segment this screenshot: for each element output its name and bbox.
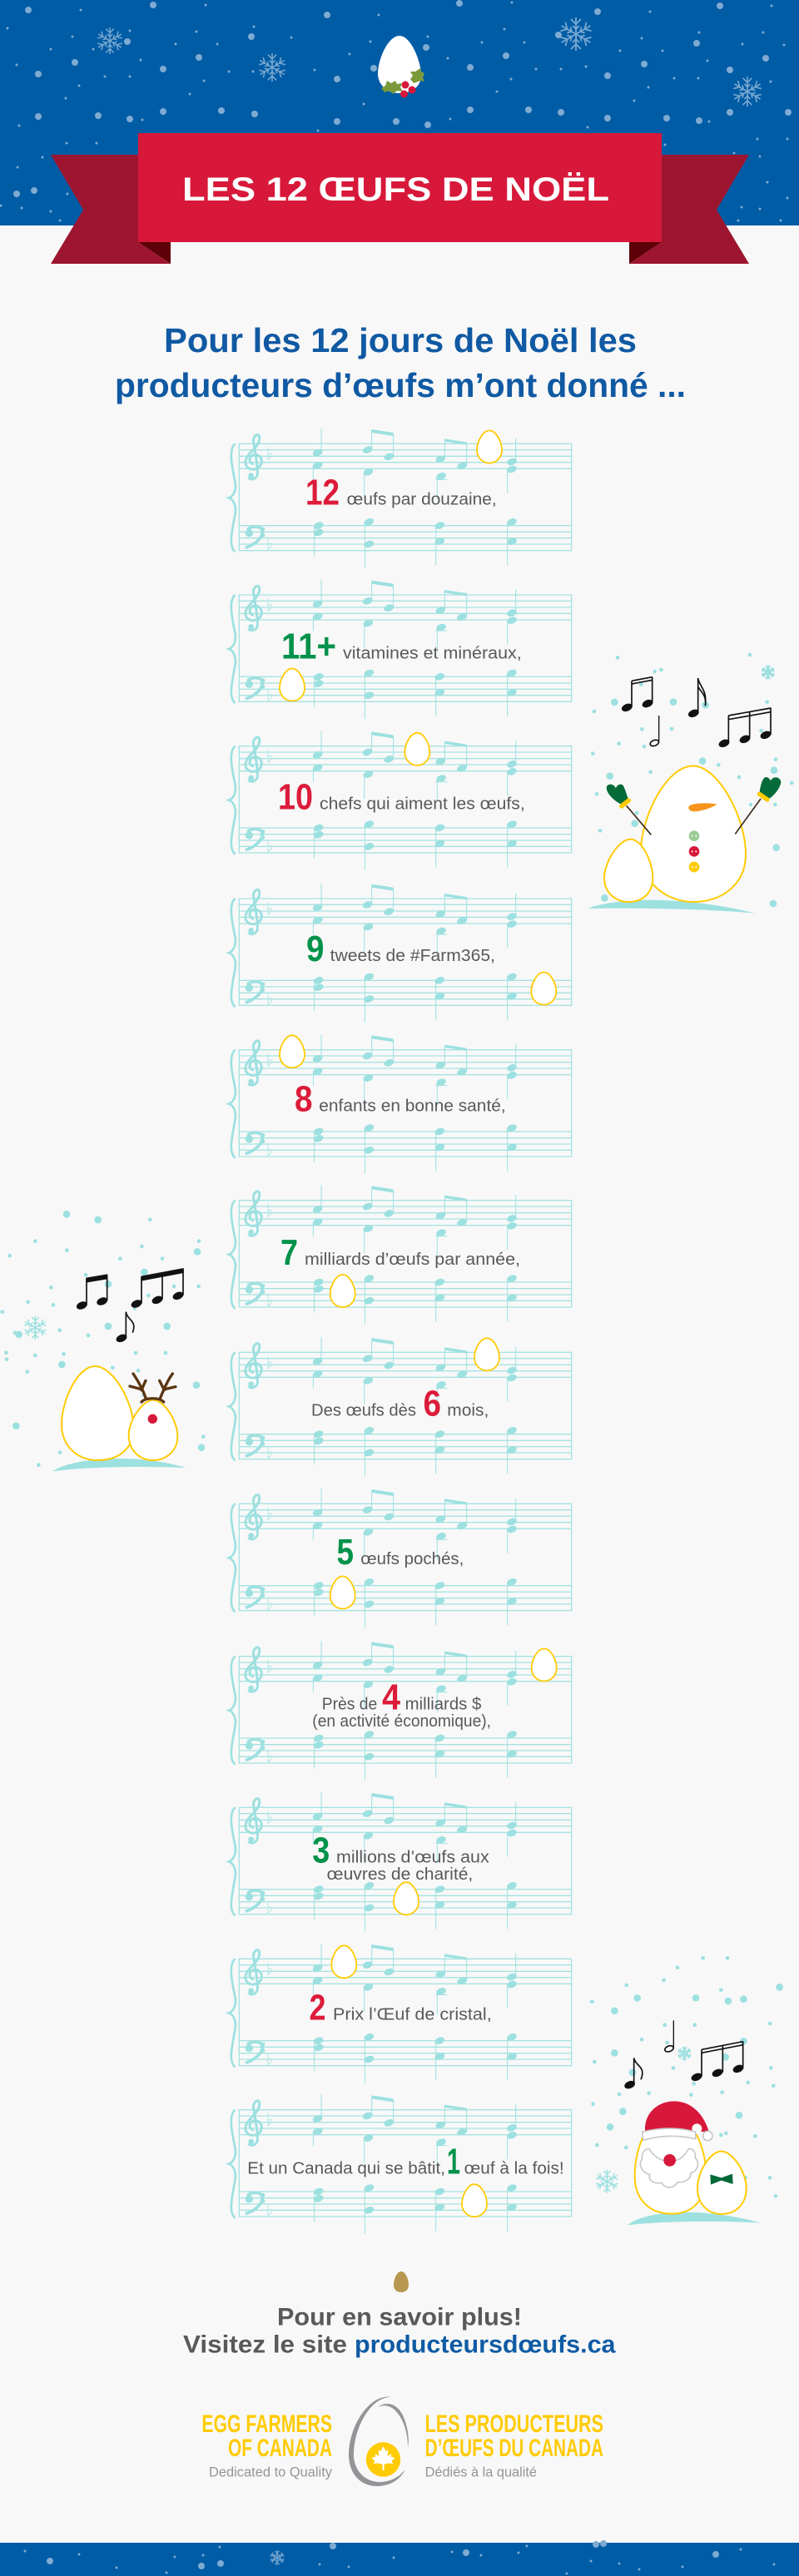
- footer band with snow: [0, 2543, 799, 2576]
- icon: small gold egg: [394, 2271, 409, 2292]
- snowman body egg: [641, 766, 746, 902]
- staff 5: 8 enfants en bonne santé: [229, 1034, 572, 1174]
- buttons: [689, 830, 699, 872]
- staff 3: 10 chefs qui aiment les œufs: chefs qui aiment les œufs,: [320, 795, 525, 814]
- red nose: [148, 1414, 157, 1424]
- subtitle heading: producteurs d’œufs m’ont donné ...: [115, 366, 686, 404]
- small egg: [604, 840, 653, 902]
- staff 5: 8 enfants en bonne santé: 8: [295, 1079, 313, 1120]
- subtitle heading: [115, 321, 686, 404]
- santa nose: [663, 2154, 676, 2167]
- logo: Egg Farmers of Canada: LES PRODUCTEURS: [425, 2410, 603, 2438]
- carrot nose: [688, 803, 717, 811]
- snow ground: [588, 900, 755, 914]
- staff 5: 8 enfants en bonne santé: enfants en bonne santé,: [319, 1097, 506, 1116]
- call to action: [183, 2303, 616, 2358]
- staff 8: 5 œufs pochés: [229, 1489, 572, 1627]
- staff 4: 9 tweets de #Farm365: [229, 884, 572, 1023]
- staff 9: près de 4 milliards $: 4: [382, 1677, 400, 1718]
- arms: [627, 799, 761, 835]
- staff 7: des œufs dès 6 mois: [229, 1337, 572, 1476]
- antlers: [130, 1374, 176, 1402]
- reindeer egg: [129, 1400, 177, 1460]
- icon: egg with holly: [378, 36, 424, 98]
- call to action: Pour en savoir plus!: [277, 2303, 522, 2331]
- call to action: Visitez le site: [183, 2331, 347, 2358]
- santa hat: [643, 2101, 712, 2141]
- staff 10: 3 millions d'œufs aux œuvres de charité: 3: [312, 1830, 330, 1870]
- bow tie egg: [697, 2152, 747, 2214]
- logo: Egg Farmers of Canada: [201, 2397, 603, 2486]
- snow ground: [52, 1459, 186, 1471]
- illustration: santa egg scene: [592, 1958, 780, 2225]
- staff 6: 7 milliards d'œufs par année: [229, 1185, 572, 1325]
- staff 10: 3 millions d'œufs aux œuvres de charité: millions d’œufs aux: [336, 1848, 489, 1866]
- santa beard: [640, 2149, 698, 2187]
- snow ground: [628, 2212, 761, 2225]
- staff 11: 2 Prix l'Œuf de cristal: 2: [310, 1988, 326, 2029]
- staff 7: des œufs dès 6 mois: Des œufs dès: [311, 1402, 416, 1420]
- staff 3: 10 chefs qui aiment les œufs: [229, 731, 572, 870]
- staff 4: 9 tweets de #Farm365: tweets de #Farm365,: [330, 947, 495, 965]
- staff 2: 11+ vitamines et minéraux: 11+: [281, 627, 336, 667]
- staff 9: près de 4 milliards $: [229, 1641, 572, 1781]
- call to action: producteursdœufs.ca: [355, 2331, 616, 2358]
- staff 12: et un Canada qui se bâtit, 1 œuf à la fois: œuf à la fois!: [464, 2159, 564, 2177]
- staff 9: près de 4 milliards $: Près de: [322, 1696, 377, 1714]
- large egg: [62, 1366, 134, 1460]
- staff 11: 2 Prix l'Œuf de cristal: [229, 1944, 572, 2083]
- staff 10: 3 millions d'œufs aux œuvres de charité: œuvres de charité,: [327, 1865, 473, 1884]
- staff 1: 12 œufs par douzaine: œufs par douzaine,: [347, 491, 497, 509]
- staff 9: près de 4 milliards $: milliards $: [405, 1696, 481, 1714]
- staff 9: près de 4 milliards $: (en activité économique),: [312, 1712, 491, 1731]
- staff 11: 2 Prix l'Œuf de cristal: Prix l’Œuf de cristal,: [333, 2006, 492, 2024]
- staff 7: des œufs dès 6 mois: 6: [423, 1384, 441, 1424]
- logo: Egg Farmers of Canada: OF CANADA: [228, 2435, 332, 2462]
- santa egg: [635, 2113, 706, 2214]
- staff 1: 12 œufs par douzaine: 12: [305, 473, 340, 513]
- music notes: [76, 1268, 185, 1344]
- staff 4: 9 tweets de #Farm365: 9: [306, 929, 325, 969]
- illustration: reindeer egg scene: [2, 1214, 203, 1471]
- staff 8: 5 œufs pochés: œufs pochés,: [360, 1550, 464, 1568]
- staff 6: 7 milliards d'œufs par année: 7: [280, 1232, 298, 1273]
- bow tie: [710, 2174, 733, 2185]
- mittens: [607, 777, 781, 806]
- header band: night sky with snow: [0, 0, 799, 225]
- title ribbon banner: [51, 133, 749, 264]
- music notes: [623, 2020, 745, 2090]
- staff 12: et un Canada qui se bâtit, 1 œuf à la fois: 1: [447, 2141, 460, 2182]
- staff 7: des œufs dès 6 mois: mois,: [447, 1402, 489, 1420]
- logo: Egg Farmers of Canada: D’ŒUFS DU CANADA: [425, 2435, 603, 2462]
- staff 2: 11+ vitamines et minéraux: vitamines et minéraux,: [343, 645, 522, 663]
- staff 8: 5 œufs pochés: 5: [336, 1532, 354, 1573]
- logo: Egg Farmers of Canada: Dedicated to Quality: [209, 2465, 332, 2480]
- title: LES 12 ŒUFS DE NOËL: [182, 171, 609, 208]
- logo: Egg Farmers of Canada: Dédiés à la qualité: [425, 2465, 537, 2480]
- music notes: [621, 676, 772, 749]
- staff 6: 7 milliards d'œufs par année: milliards d’œufs par année,: [305, 1251, 520, 1269]
- staff 1: 12 œufs par douzaine: [229, 429, 572, 567]
- staff 2: 11+ vitamines et minéraux: [229, 580, 572, 719]
- illustration: snowman egg scene: [588, 655, 792, 914]
- logo: Egg Farmers of Canada: EGG FARMERS: [201, 2410, 332, 2438]
- staff 12: et un Canada qui se bâtit, 1 œuf à la fois: Et un Canada qui se bâtit,: [247, 2159, 445, 2177]
- subtitle heading: Pour les 12 jours de Noël les: [164, 321, 637, 359]
- staff 12: et un Canada qui se bâtit, 1 œuf à la fois: [229, 2094, 572, 2234]
- staff 10: 3 millions d'œufs aux œuvres de charité: [229, 1792, 572, 1931]
- staff 3: 10 chefs qui aiment les œufs: 10: [278, 777, 313, 818]
